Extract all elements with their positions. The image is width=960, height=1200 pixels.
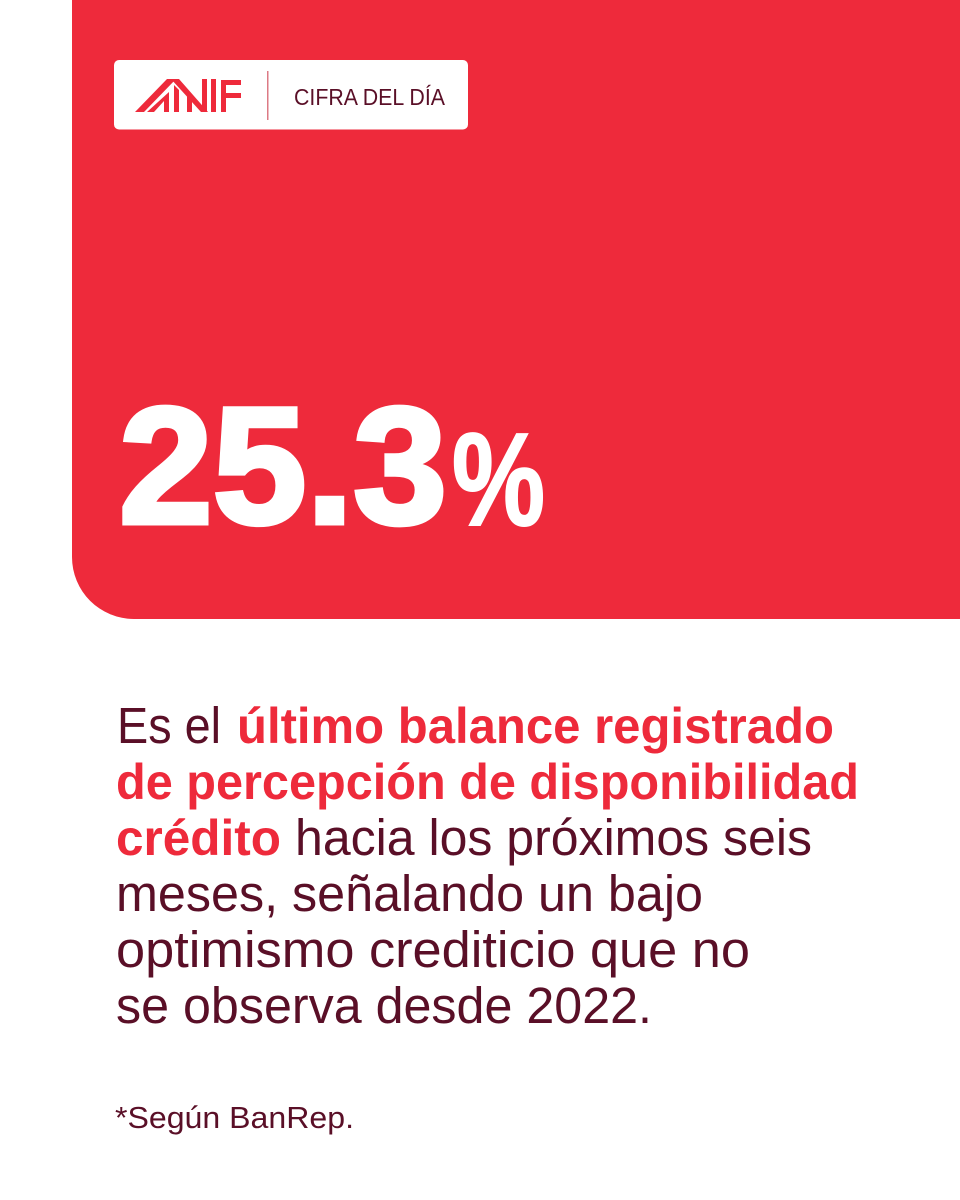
body text: meses, señalando un bajo bbox=[116, 865, 703, 922]
logo badge bbox=[114, 60, 468, 130]
body text: último balance registrado bbox=[237, 698, 834, 754]
footnote: *Según BanRep. bbox=[115, 1100, 354, 1135]
panel: red header bbox=[72, 0, 960, 619]
big number: % bbox=[452, 406, 545, 553]
body text: Es el bbox=[117, 697, 221, 754]
body text bbox=[116, 697, 859, 1034]
body text: optimismo crediticio que no bbox=[116, 921, 750, 978]
body text: se observa desde 2022. bbox=[116, 977, 652, 1034]
body text: de percepción de disponibilidad bbox=[116, 754, 859, 810]
icon: ANIF logo bbox=[135, 79, 241, 112]
big number: 25.3 bbox=[119, 374, 447, 559]
label: cifra del día: CIFRA DEL DÍA bbox=[294, 84, 446, 110]
body text: hacia los próximos seis bbox=[295, 809, 812, 866]
body text: crédito bbox=[116, 810, 281, 866]
divider bbox=[267, 71, 268, 120]
